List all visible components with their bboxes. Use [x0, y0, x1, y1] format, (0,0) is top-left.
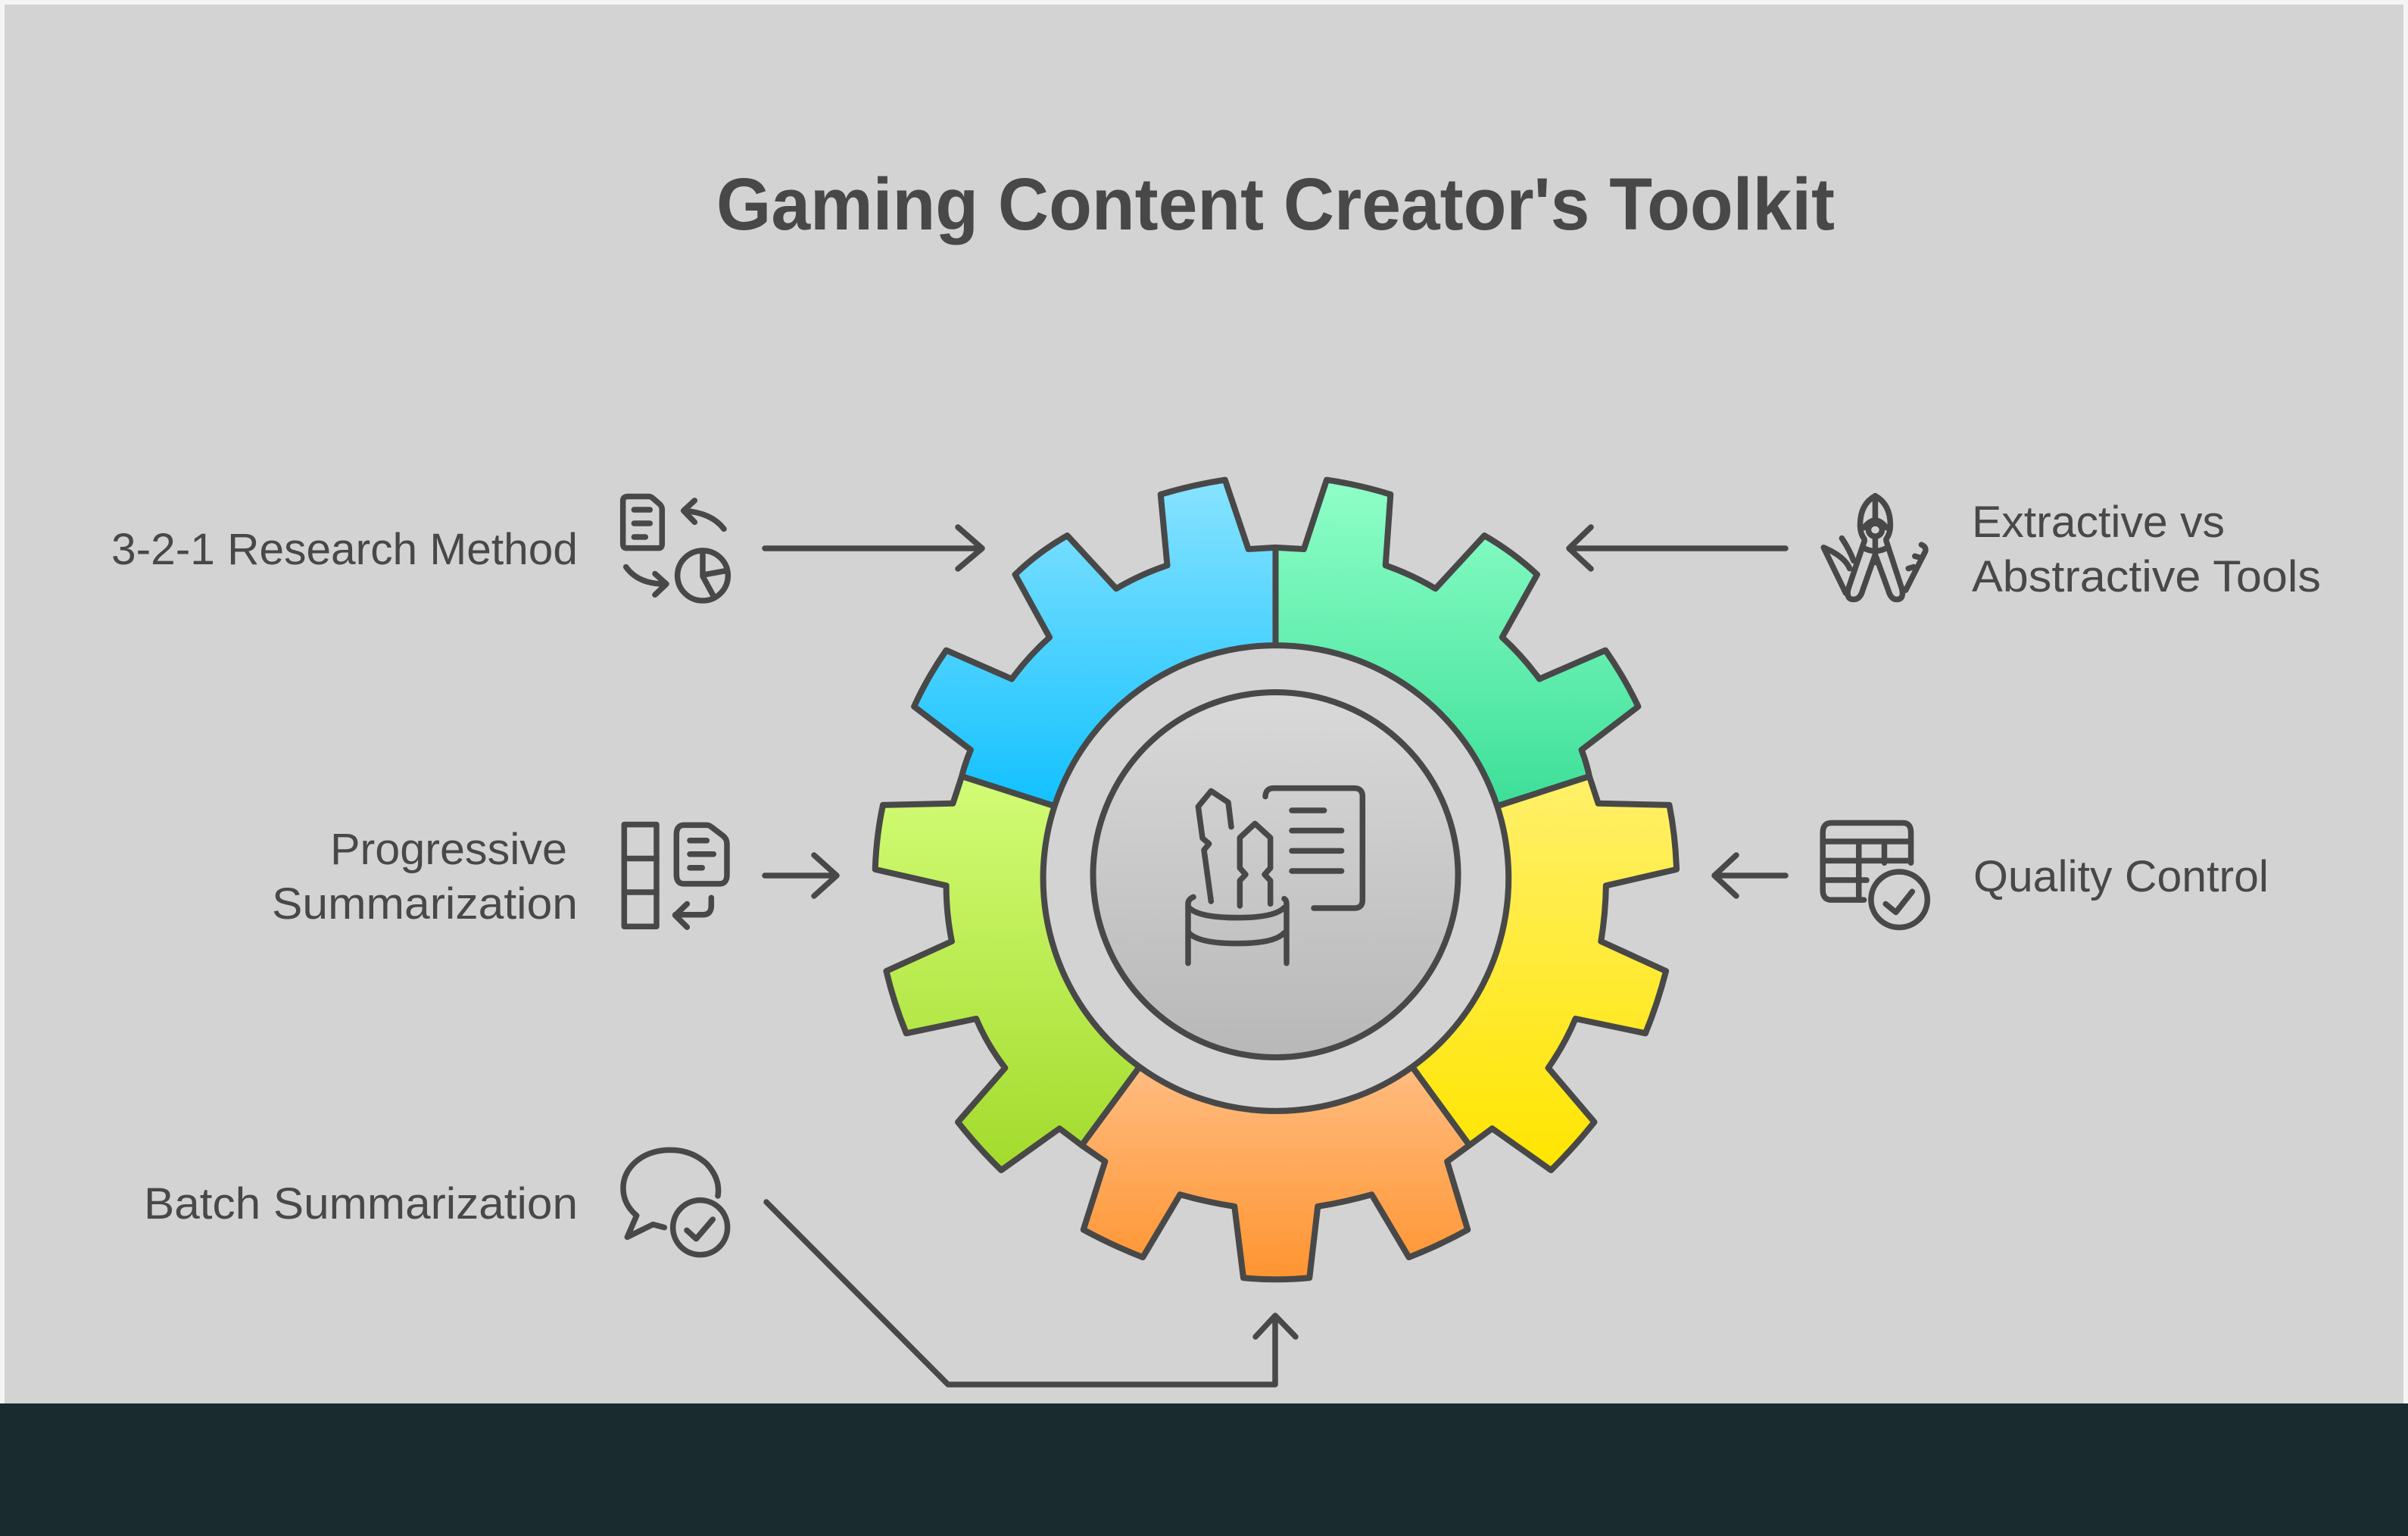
arrow: research method to gear	[765, 527, 982, 569]
arrow: progressive summarization to gear	[765, 855, 837, 896]
label: Extractive vs Abstractive Tools	[1972, 498, 2321, 601]
gear segment: lime	[875, 776, 1140, 1170]
center hub circle	[1093, 692, 1458, 1057]
title: Gaming Content Creator's Toolkit	[716, 163, 1835, 245]
arrow: batch summarization to gear	[766, 1202, 1296, 1385]
icon: table with check	[1823, 823, 1927, 927]
label: Progressive Summarization: Progressive	[330, 825, 567, 874]
icon: speech bubble with check	[623, 1150, 728, 1255]
label: Quality Control: Quality Control	[1973, 852, 2269, 901]
label: Progressive Summarization: Summarization	[272, 879, 578, 929]
icon: pens in cup with document	[1188, 788, 1362, 963]
gear segment: green	[1276, 480, 1638, 806]
icon: progressive summarization	[624, 825, 727, 927]
label: Extractive vs Abstractive Tools: Extractive vs	[1972, 498, 2225, 547]
label: Batch Summarization: Batch Summarization	[144, 1179, 578, 1228]
footer band	[0, 1403, 2408, 1536]
icon: multi-tool pliers	[1823, 496, 1926, 599]
label: 3-2-1 Research Method: 3-2-1 Research Method	[111, 525, 578, 574]
gear diagram	[875, 480, 1677, 1279]
arrow: quality control to gear	[1714, 855, 1786, 896]
label: Extractive vs Abstractive Tools: Abstractive Tools	[1972, 552, 2321, 601]
label: Progressive Summarization	[272, 825, 578, 929]
gear segment: yellow	[1412, 776, 1677, 1170]
gear segment: blue	[914, 480, 1276, 806]
gear segment: orange	[1082, 1067, 1469, 1279]
arrow: extractive tools to gear	[1569, 527, 1786, 569]
icon: research method	[623, 497, 728, 601]
